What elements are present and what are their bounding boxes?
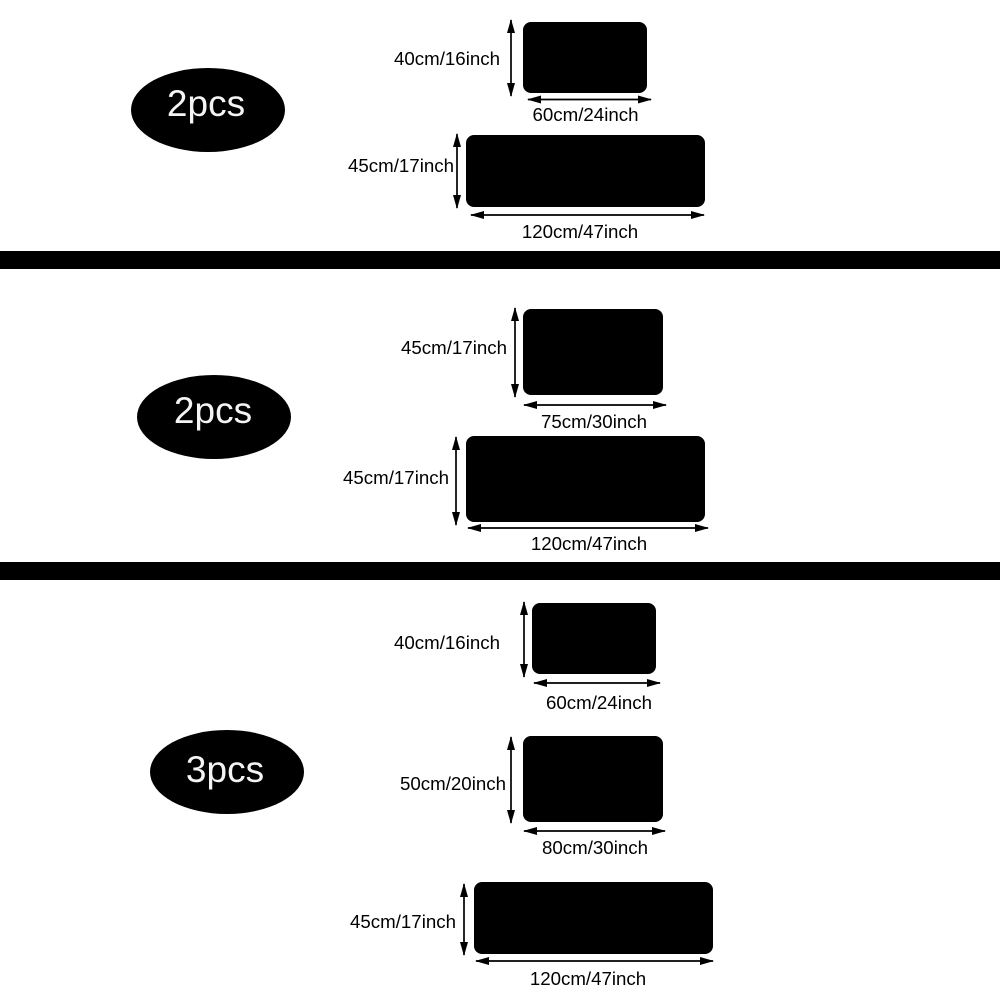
mat: 45x120 with dimensions [350, 882, 713, 989]
mat: 45x120 with dimensions: 120cm/47inch [522, 221, 638, 242]
mat: 45x120 with dimensions: 45cm/17inch [348, 155, 454, 176]
mat: 45x120 with dimensions: 120cm/47inch [531, 533, 647, 554]
divider bar: top [0, 251, 1000, 269]
mat: 50x80 with dimensions: 50cm/20inch [400, 773, 506, 794]
badge: 2pcs: 2pcs [174, 390, 252, 431]
mat: 40x60 with dimensions [394, 602, 660, 713]
badge: 3pcs [150, 730, 304, 814]
mat: 40x60 with dimensions: 40cm/16inch [394, 632, 500, 653]
badge: 3pcs: 3pcs [186, 749, 264, 790]
section 3: 3pcs set [150, 602, 713, 989]
mat: 45x75 with dimensions: 75cm/30inch [541, 411, 647, 432]
section 2: 2pcs set [137, 308, 708, 554]
divider bar: middle [0, 562, 1000, 580]
mat: 45x120 with dimensions [343, 436, 708, 554]
mat: 45x120 with dimensions: 45cm/17inch [350, 911, 456, 932]
badge: 2pcs [137, 375, 291, 459]
mat: 45x120 with dimensions: 120cm/47inch [530, 968, 646, 989]
mat: 40x60 with dimensions: 40cm/16inch [394, 48, 500, 69]
mat: 40x60 with dimensions: 60cm/24inch [546, 692, 652, 713]
mat: 45x75 with dimensions: 45cm/17inch [401, 337, 507, 358]
mat: 40x60 with dimensions [394, 20, 651, 125]
mat: 50x80 with dimensions: 80cm/30inch [542, 837, 648, 858]
badge: 2pcs: 2pcs [167, 83, 245, 124]
badge: 2pcs [131, 68, 285, 152]
mat: 50x80 with dimensions [400, 736, 665, 858]
mat: 40x60 with dimensions: 60cm/24inch [533, 104, 638, 125]
mat: 45x75 with dimensions [401, 308, 666, 432]
mat: 45x120 with dimensions [348, 134, 705, 242]
section 1: 2pcs set [131, 20, 705, 242]
mat: 45x120 with dimensions: 45cm/17inch [343, 467, 449, 488]
